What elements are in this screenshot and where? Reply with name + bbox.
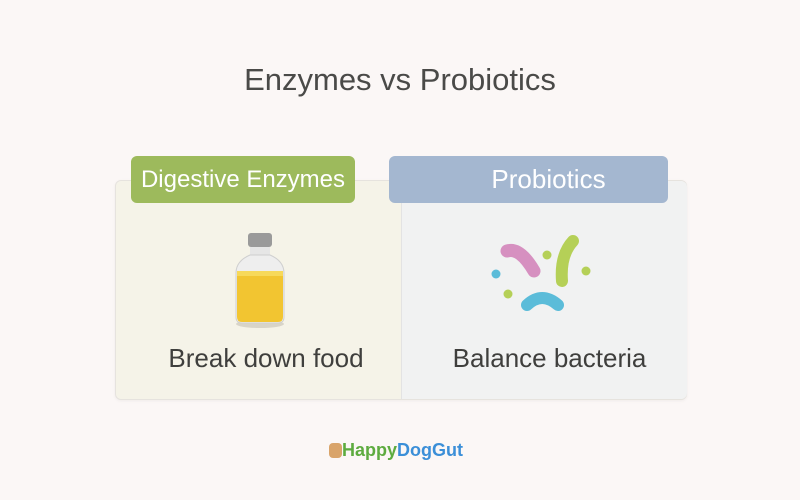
heading: probiotics tab xyxy=(389,156,668,203)
icon: dog xyxy=(329,443,342,458)
heading: probiotics tab: Probiotics xyxy=(491,164,606,194)
text: break down food: Break down food xyxy=(168,343,364,373)
panel: comparison container xyxy=(115,180,687,400)
icon: bottle xyxy=(236,233,284,328)
heading: digestive enzymes tab xyxy=(131,156,355,203)
title: Enzymes vs Probiotics xyxy=(244,62,556,97)
panel: digestive enzymes xyxy=(116,181,401,399)
logo: HappyDogGut xyxy=(342,440,463,460)
text: balance bacteria: Balance bacteria xyxy=(453,343,646,373)
icon: bacteria xyxy=(492,235,590,311)
heading: digestive enzymes tab: Digestive Enzymes xyxy=(141,166,345,193)
panel: probiotics xyxy=(401,181,687,399)
